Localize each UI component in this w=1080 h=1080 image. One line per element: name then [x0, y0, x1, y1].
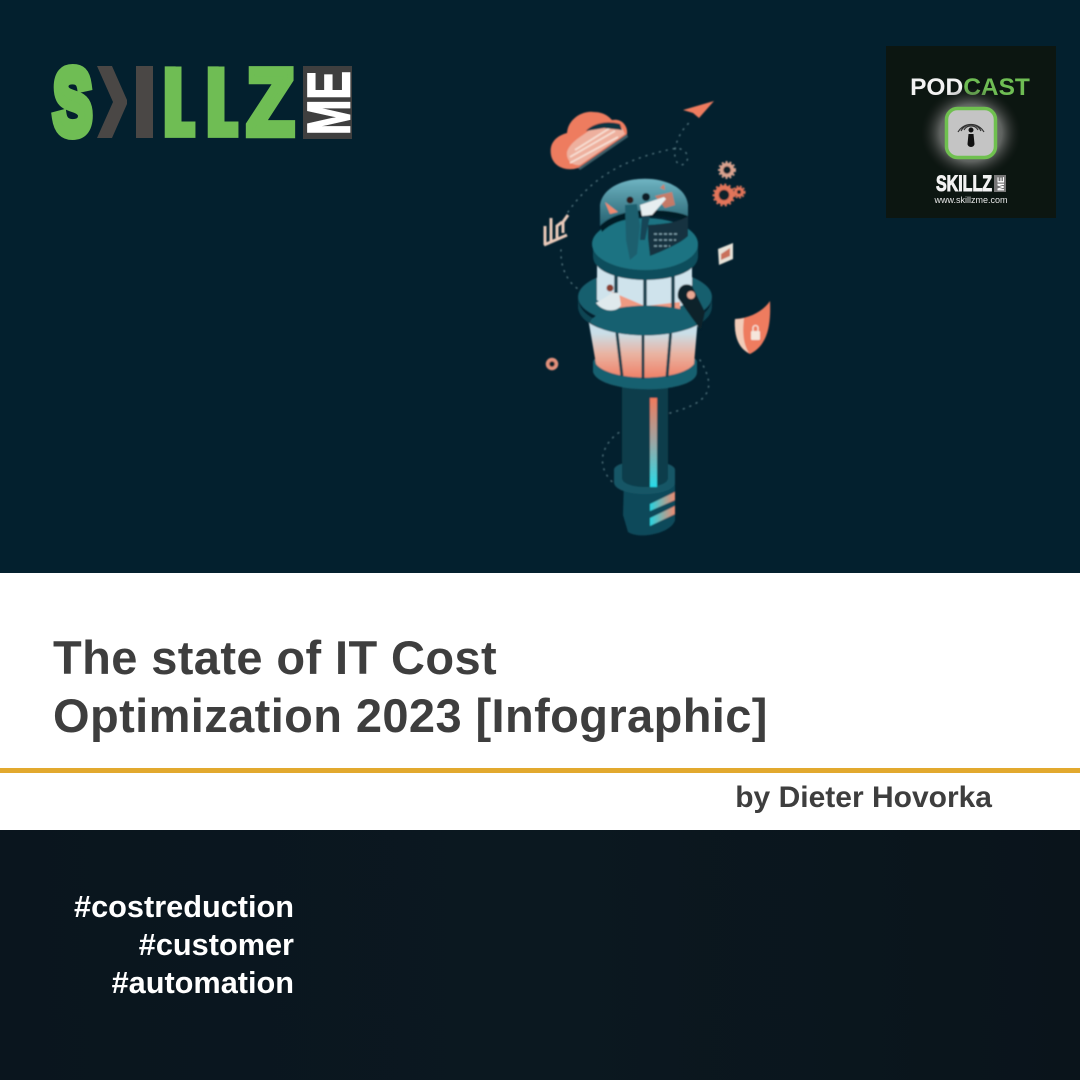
- icon: cloud: [551, 112, 628, 170]
- icon: small gear: [548, 360, 556, 368]
- logo: SkillzME: S: [54, 52, 92, 154]
- person seated: [678, 284, 705, 330]
- hashtags: [74, 889, 294, 1000]
- middle deck: [578, 265, 712, 336]
- title: [53, 631, 768, 742]
- lower cabin: [588, 318, 698, 389]
- dotted paths: [561, 122, 709, 488]
- tower base: [614, 461, 675, 535]
- logo: SkillzME: [51, 50, 363, 156]
- gold rule: [0, 768, 1080, 773]
- hashtags: #costreduction: [74, 889, 294, 924]
- icon: shield: [735, 301, 770, 354]
- heading: podcast: PODCAST: [910, 74, 1030, 101]
- icon: small document: [718, 243, 733, 265]
- people at screen: [625, 193, 666, 260]
- hashtags: #customer: [139, 927, 294, 962]
- logo: SkillzME: L: [163, 50, 195, 156]
- panel: dark hero background: [0, 0, 1080, 573]
- logo: SkillzME: Z: [247, 51, 294, 155]
- person with laptop: [596, 284, 621, 310]
- tower stem: [622, 385, 668, 487]
- logo: SkillzME: ME: [296, 71, 363, 135]
- title: Optimization 2023 [Infographic]: [53, 689, 768, 742]
- small logo: ME: [996, 177, 1007, 191]
- title: The state of IT Cost: [53, 631, 497, 684]
- top deck: [592, 218, 698, 280]
- icon: podcast button: [926, 88, 1016, 174]
- panel: dark footer: [0, 830, 1080, 1080]
- panel: podcast badge: [886, 46, 1056, 218]
- illustration: control tower: [542, 100, 772, 536]
- website url: www.skillzme.com: [934, 195, 1008, 205]
- icon: bar chart: [544, 215, 568, 245]
- author byline: by Dieter Hovorka: [735, 781, 992, 814]
- panel: white title band: [0, 573, 1080, 830]
- icon: paper plane: [683, 101, 714, 118]
- hashtags: #automation: [112, 965, 294, 1000]
- logo: SkillzME: L: [206, 50, 238, 156]
- icon: gears: [714, 162, 745, 206]
- holographic screen: [600, 179, 688, 256]
